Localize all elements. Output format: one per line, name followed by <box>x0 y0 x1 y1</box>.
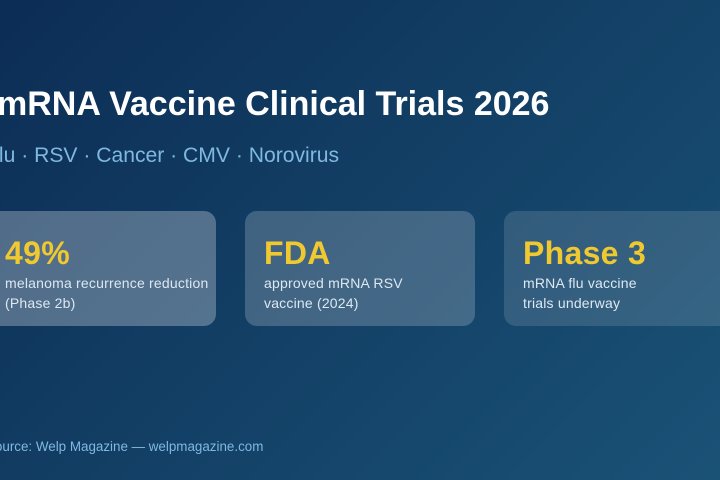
stat description <box>5 275 208 311</box>
title: mRNA Vaccine Clinical Trials 2026 <box>0 85 549 123</box>
card: melanoma recurrence reduction <box>0 211 216 326</box>
stat: 49%: 49% <box>5 235 70 271</box>
stat description: trials underway <box>523 295 620 311</box>
stat description: mRNA flu vaccine <box>523 275 637 291</box>
stat: FDA: FDA <box>264 235 331 271</box>
card: FDA approval <box>245 211 475 326</box>
stat description: vaccine (2024) <box>264 295 359 311</box>
card: Phase 3 trials <box>504 211 720 326</box>
stat description: (Phase 2b) <box>5 295 75 311</box>
stat description <box>523 275 637 311</box>
stat description: melanoma recurrence reduction <box>5 275 208 291</box>
stat: Phase 3: Phase 3 <box>523 235 646 271</box>
stat description: approved mRNA RSV <box>264 275 403 291</box>
stat description <box>264 275 403 311</box>
